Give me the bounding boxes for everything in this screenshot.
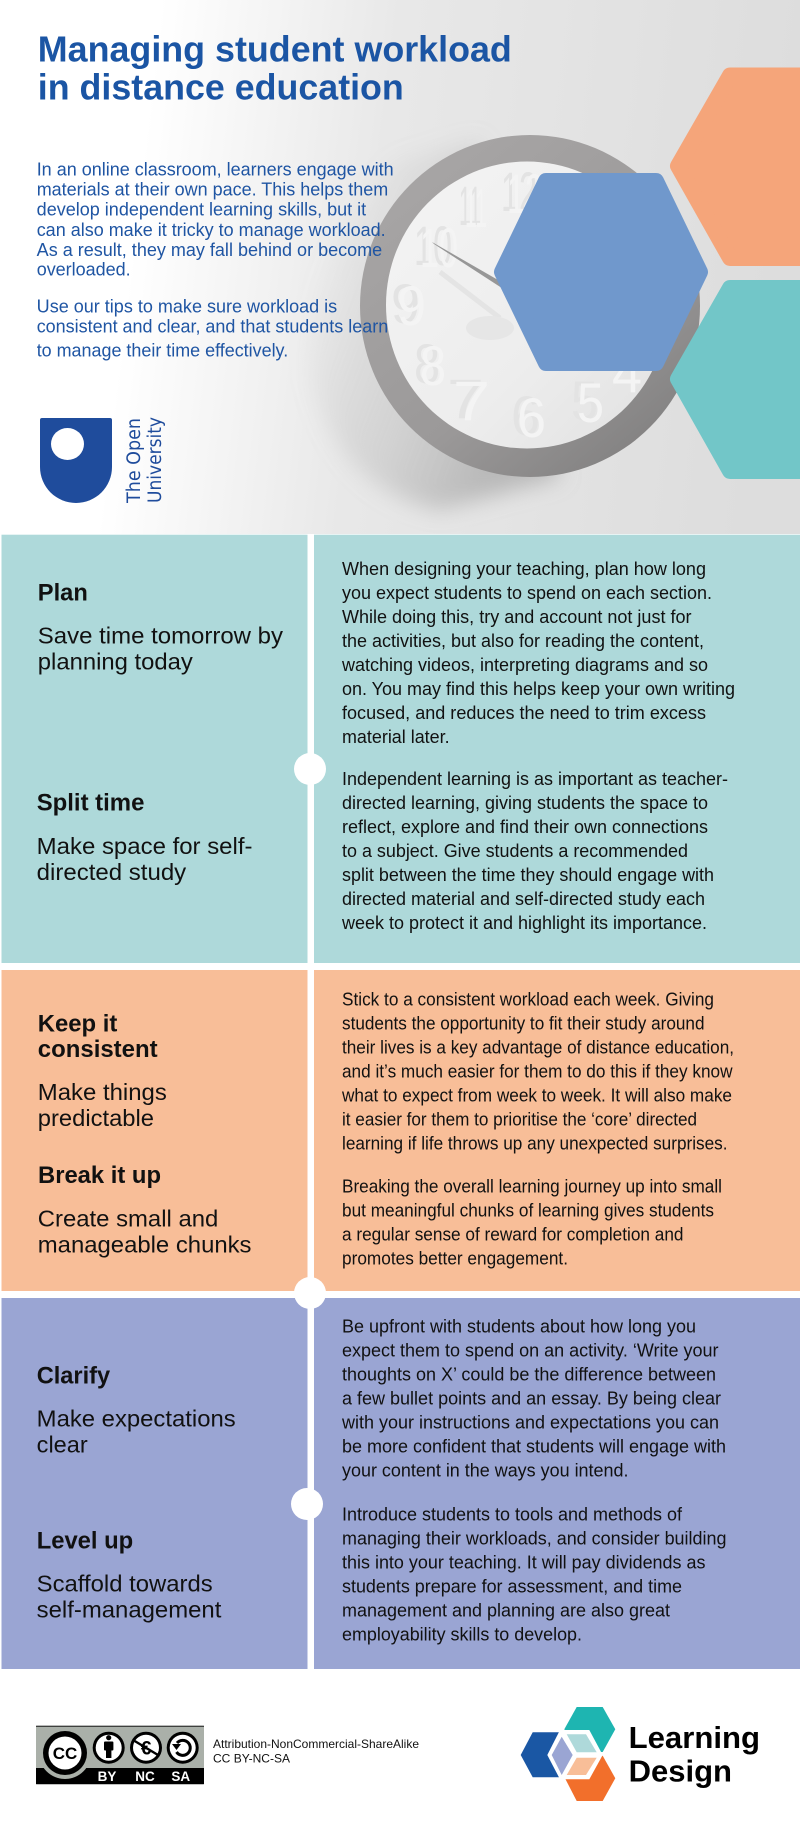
centre facet: purple bbox=[552, 1737, 573, 1775]
text: plan bbox=[341, 559, 735, 747]
intro text: can also make it tricky to manage workload. bbox=[37, 220, 386, 240]
text: keep it consistent bbox=[341, 990, 734, 1154]
text: break it up: a regular sense of reward for completion and bbox=[342, 1225, 684, 1245]
text: break it up bbox=[342, 1177, 722, 1269]
heading: level up bbox=[37, 1528, 222, 1623]
intro text: As a result, they may fall behind or become bbox=[37, 240, 382, 260]
text: level up: managing their workloads, and consider building bbox=[342, 1529, 726, 1549]
panel: clarify and level up bbox=[2, 1298, 800, 1669]
blue hexagon bbox=[521, 1732, 572, 1777]
teal hexagon bbox=[564, 1707, 615, 1752]
clock photo: 5 bbox=[571, 369, 598, 432]
heading: clarify: Make expectations bbox=[37, 1406, 236, 1432]
heading: split time: Make space for self- bbox=[37, 833, 252, 859]
heading: keep it consistent bbox=[38, 1010, 167, 1131]
clock photo bbox=[309, 135, 700, 510]
text: level up: Introduce students to tools and methods of bbox=[342, 1505, 683, 1525]
clock photo: 7 bbox=[453, 369, 490, 432]
wall background bbox=[0, 0, 800, 534]
wordmark: Design bbox=[629, 1754, 732, 1789]
text: clarify: be more confident that students will engage with bbox=[342, 1437, 726, 1457]
text: keep it consistent: what to expect from week to week. It will also make bbox=[341, 1086, 732, 1106]
intro text: consistent and clear, and that students learn bbox=[37, 317, 388, 337]
clock photo: 11 bbox=[465, 176, 487, 239]
text: split time: split between the time they should engage with bbox=[342, 865, 714, 885]
Learning Design logo bbox=[521, 1707, 760, 1801]
icon: non-commercial bbox=[130, 1732, 162, 1764]
text: split time: Independent learning is as important as teacher- bbox=[342, 769, 728, 789]
intro text: In an online classroom, learners engage with bbox=[37, 160, 394, 180]
text: plan: While doing this, try and account not just for bbox=[342, 607, 692, 627]
heading: plan: Plan bbox=[38, 580, 88, 607]
heading: level up: Level up bbox=[37, 1528, 133, 1555]
badge labels: NC bbox=[135, 1769, 155, 1784]
text: plan: the activities, but also for reading the content, bbox=[342, 631, 704, 651]
text: clarify: a few bullet points and an essay. By being clear bbox=[342, 1389, 721, 1409]
heading: break it up: Create small and bbox=[38, 1206, 218, 1232]
heading: split time: Split time bbox=[37, 790, 144, 817]
connector circle 1 bbox=[294, 753, 326, 785]
header panel bbox=[0, 0, 800, 534]
text: keep it consistent: their lives is a key advantage of distance education, bbox=[342, 1038, 734, 1058]
heading: plan: Save time tomorrow by bbox=[38, 622, 283, 648]
centre facet: teal bbox=[567, 1734, 597, 1752]
orange hexagon bbox=[678, 76, 800, 258]
wordmark: Learning bbox=[629, 1720, 760, 1755]
heading: level up: self-management bbox=[37, 1597, 222, 1623]
clock photo: 9 bbox=[397, 274, 426, 337]
licence text: Attribution-NonCommercial-ShareAlike bbox=[213, 1737, 419, 1751]
clock photo: 6 bbox=[511, 384, 540, 447]
heading: break it up bbox=[38, 1162, 251, 1258]
clock photo: 12 bbox=[507, 162, 543, 225]
text: keep it consistent: students the opportunity to fit their study around bbox=[342, 1014, 704, 1034]
text: keep it consistent: it easier for them to prioritise the ‘core’ directed bbox=[342, 1110, 697, 1130]
text: break it up: promotes better engagement. bbox=[342, 1249, 568, 1269]
heading: break it up: Break it up bbox=[38, 1162, 161, 1189]
title: Managing student workload bbox=[38, 28, 512, 70]
centre facet: orange bbox=[567, 1758, 597, 1775]
text: level up: students prepare for assessment, and time bbox=[342, 1577, 682, 1597]
text: split time: to a subject. Give students a recommended bbox=[342, 841, 688, 861]
text: break it up: but meaningful chunks of learning gives students bbox=[342, 1201, 714, 1221]
Open University logo bbox=[40, 417, 166, 504]
heading: keep it consistent: consistent bbox=[38, 1036, 158, 1063]
text: clarify: expect them to spend on an activity. ‘Write your bbox=[342, 1341, 719, 1361]
licence badge bbox=[36, 1726, 204, 1784]
text: split time bbox=[341, 769, 728, 933]
teal left panel bbox=[2, 535, 308, 963]
purple left panel bbox=[2, 1298, 308, 1669]
heading: clarify: Clarify bbox=[37, 1362, 111, 1389]
heading: break it up: manageable chunks bbox=[38, 1232, 251, 1258]
icon: non-commercial: € bbox=[141, 1738, 152, 1760]
intro text: to manage their time effectively. bbox=[37, 341, 288, 361]
text: keep it consistent: and it’s much easier for them to do this if they know bbox=[342, 1062, 733, 1082]
clock photo: 5 bbox=[577, 371, 604, 434]
licence text bbox=[213, 1737, 419, 1766]
heading: clarify: clear bbox=[37, 1432, 88, 1458]
text: level up: this into your teaching. It will pay dividends as bbox=[342, 1553, 706, 1573]
connector circle 2 bbox=[294, 1277, 326, 1309]
icon: attribution bbox=[93, 1732, 125, 1764]
icon: share-alike bbox=[167, 1732, 199, 1764]
text: clarify: thoughts on X’ could be the difference between bbox=[342, 1365, 716, 1385]
clock photo: 12 bbox=[501, 160, 537, 223]
badge labels bbox=[98, 1769, 190, 1784]
text: clarify bbox=[341, 1317, 726, 1481]
text: clarify: with your instructions and expectations you can bbox=[341, 1413, 719, 1433]
white centre hexagon bbox=[547, 1730, 603, 1779]
panel: consistent and break it up bbox=[2, 970, 800, 1291]
badge labels: SA bbox=[171, 1769, 190, 1784]
text: keep it consistent: Stick to a consistent workload each week. Giving bbox=[342, 990, 714, 1010]
clock photo: 7 bbox=[447, 367, 484, 430]
clock photo: 9 bbox=[391, 272, 420, 335]
heading: keep it consistent: predictable bbox=[38, 1105, 154, 1131]
teal right panel bbox=[314, 535, 800, 963]
wordmark bbox=[629, 1720, 760, 1789]
text: break it up: Breaking the overall learning journey up into small bbox=[342, 1177, 722, 1197]
orange hexagon bbox=[565, 1756, 615, 1801]
licence text: CC BY-NC-SA bbox=[213, 1752, 290, 1766]
text: split time: reflect, explore and find their own connections bbox=[342, 817, 708, 837]
intro text: develop independent learning skills, but it bbox=[37, 200, 366, 220]
icon: cc: CC bbox=[53, 1744, 77, 1763]
text: split time: directed material and self-directed study each bbox=[342, 889, 705, 909]
text: clarify: your content in the ways you intend. bbox=[342, 1461, 628, 1481]
text: clarify: Be upfront with students about how long you bbox=[342, 1317, 696, 1337]
heading: level up: Scaffold towards bbox=[37, 1571, 213, 1597]
clock photo: 10 bbox=[414, 214, 452, 277]
heading: plan bbox=[38, 580, 283, 674]
clock photo: 4 bbox=[612, 341, 642, 404]
connector circle 3 bbox=[291, 1488, 323, 1520]
title bbox=[38, 28, 512, 108]
clock photo: 8 bbox=[420, 334, 446, 397]
clock photo: 11 bbox=[459, 174, 481, 237]
text: plan: watching videos, interpreting diagrams and so bbox=[341, 655, 708, 675]
text: level up bbox=[342, 1505, 726, 1645]
icon: cc bbox=[43, 1731, 87, 1775]
text: split time: week to protect it and highlight its importance. bbox=[341, 913, 707, 933]
heading: plan: planning today bbox=[38, 648, 193, 674]
heading: keep it consistent: Make things bbox=[38, 1079, 167, 1105]
text: plan: you expect students to spend on each section. bbox=[342, 583, 712, 603]
blue hexagon bbox=[502, 181, 700, 363]
heading: keep it consistent: Keep it bbox=[38, 1010, 117, 1037]
text: plan: on. You may find this helps keep your own writing bbox=[342, 679, 735, 699]
clock photo: 8 bbox=[414, 332, 440, 395]
panel: plan and split time bbox=[2, 535, 800, 963]
intro text: overloaded. bbox=[37, 260, 131, 280]
badge labels: BY bbox=[98, 1769, 116, 1784]
clock photo: 10 bbox=[420, 216, 458, 279]
intro text bbox=[37, 160, 394, 361]
Open University logo: University bbox=[145, 417, 166, 503]
orange right panel bbox=[314, 970, 800, 1291]
intro text: Use our tips to make sure workload is bbox=[37, 297, 337, 317]
text: plan: When designing your teaching, plan how long bbox=[342, 559, 706, 579]
heading: split time: directed study bbox=[37, 859, 186, 885]
text: keep it consistent: learning if life throws up any unexpected surprises. bbox=[342, 1134, 728, 1154]
Open University logo: The Open bbox=[124, 418, 145, 504]
text: plan: focused, and reduces the need to trim excess bbox=[342, 703, 706, 723]
text: split time: directed learning, giving students the space to bbox=[342, 793, 708, 813]
heading: split time bbox=[37, 790, 252, 885]
title: in distance education bbox=[38, 66, 404, 108]
intro text: materials at their own pace. This helps them bbox=[37, 180, 388, 200]
heading: clarify bbox=[37, 1362, 236, 1458]
text: level up: employability skills to develop. bbox=[342, 1625, 582, 1645]
clock photo: 6 bbox=[517, 386, 546, 449]
orange left panel bbox=[2, 970, 308, 1291]
text: plan: material later. bbox=[342, 727, 450, 747]
teal hexagon bbox=[678, 288, 800, 471]
purple right panel bbox=[314, 1298, 800, 1669]
text: level up: management and planning are also great bbox=[342, 1601, 670, 1621]
